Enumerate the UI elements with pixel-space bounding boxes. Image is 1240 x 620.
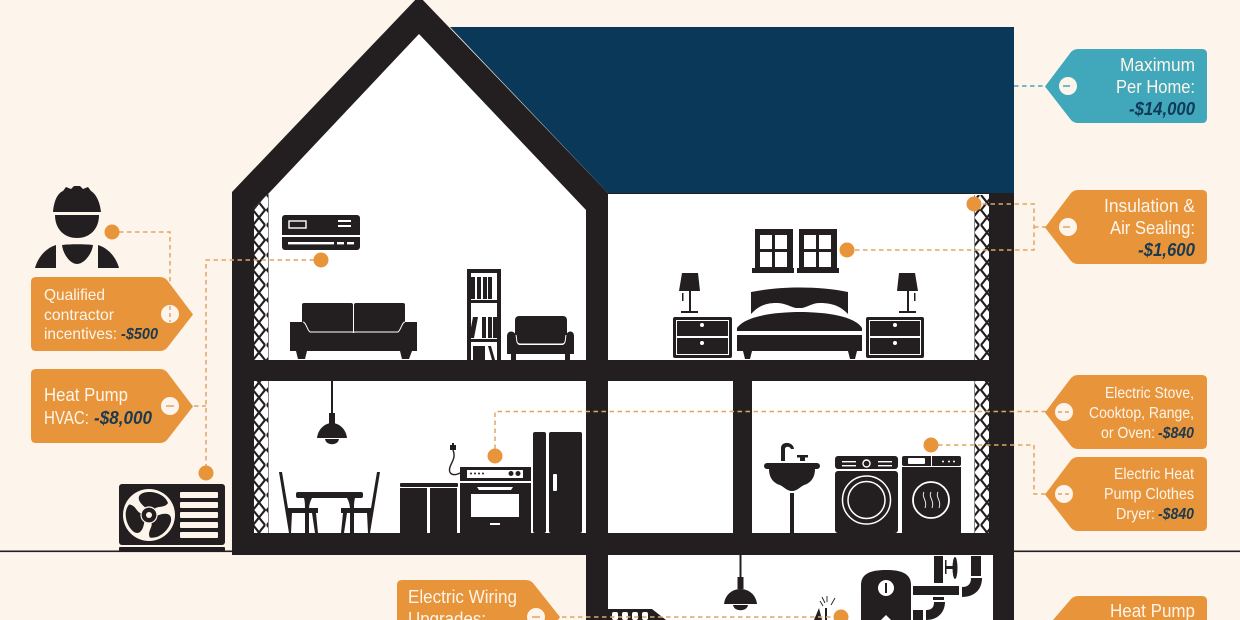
insulation lattice: right upper [975,195,989,360]
icon: outdoor heat pump unit [119,484,225,552]
ground line [0,550,1240,552]
icon: bookshelf [467,269,501,360]
icon: armchair [507,316,574,360]
tag: electric heat pump clothes dryer [1045,457,1207,531]
marker dots [104,196,982,620]
tag: heat pump water heater (cropped) [1053,596,1207,620]
tag: electric wiring upgrades (cropped) [397,580,560,620]
icon: pendant lamp kitchen [317,381,347,444]
tag: electric stove: -$840 [1158,425,1194,442]
tag: electric wiring upgrades (cropped): Electric Wiring [408,587,517,607]
tag: qualified contractor: incentives: [44,326,117,343]
tag: qualified contractor: Qualified [44,287,105,304]
tag: qualified contractor: contractor [44,307,115,324]
icon: left nightstand and lamp [673,273,732,358]
connector lines [119,86,1072,617]
room: bedroom [608,194,989,360]
tag: insulation and air sealing: -$1,600 [1138,240,1195,260]
tag: electric stove [1045,375,1207,449]
icon: electric stove with plug [449,443,531,533]
tag: heat pump HVAC: Heat Pump [44,385,128,405]
tag: maximum per home: -$14,000 [1129,99,1195,119]
tag: insulation and air sealing [1045,190,1207,264]
icon: sofa [290,303,417,359]
house structure [232,0,1014,620]
icon: wall air conditioner [282,215,360,250]
tag: heat pump HVAC [31,369,193,443]
icon: plumbing pipes [913,556,982,620]
tag: insulation and air sealing: Insulation & [1104,196,1195,216]
icon: electrical spark [814,596,835,620]
tag: maximum per home [1045,49,1207,123]
icon: water heater [861,570,911,620]
room: middle closet [608,381,733,533]
tag: maximum per home: Per Home: [1116,77,1195,97]
tag: electric heat pump clothes dryer: Electric Heat [1114,466,1194,483]
icon: kitchen counter [400,483,458,533]
tag: insulation and air sealing: Air Sealing: [1110,218,1195,238]
tag: electric heat pump clothes dryer: Dryer: [1116,506,1155,523]
tag: qualified contractor [31,277,193,351]
icon: double window [752,229,839,273]
insulation lattice: left lower [254,381,268,533]
icon: bed [737,288,862,359]
tag: qualified contractor: -$500 [121,326,158,343]
room: laundry [752,381,989,533]
icon: basement radiator [608,609,666,620]
tag: electric heat pump clothes dryer: -$840 [1158,506,1194,523]
icon: refrigerator [533,432,582,533]
tag: electric stove: Cooktop, Range, [1089,405,1194,422]
lattice edge lines [268,194,974,533]
tag: maximum per home: Maximum [1120,55,1195,75]
icon: basement pendant lamp [724,555,757,610]
insulation lattice: left upper [254,194,268,360]
icon: dining table and chairs [279,472,380,533]
room: living room [254,34,586,360]
tag: electric stove: or Oven: [1101,425,1155,442]
icon: worker [35,186,119,268]
navy roof [450,27,1014,193]
tag: electric heat pump clothes dryer: Pump Clothes [1104,486,1194,503]
room: kitchen [254,381,586,533]
tag: electric stove: Electric Stove, [1105,385,1194,402]
icon: washing machine [835,456,898,533]
room: basement [608,555,993,620]
insulation lattice: right lower [975,381,989,533]
icon: clothes dryer [902,456,961,533]
icon: right nightstand and lamp [866,273,924,358]
tag: heat pump HVAC: HVAC: [44,408,89,428]
tag: heat pump HVAC: -$8,000 [94,408,152,428]
icon: bathroom sink [764,443,820,533]
